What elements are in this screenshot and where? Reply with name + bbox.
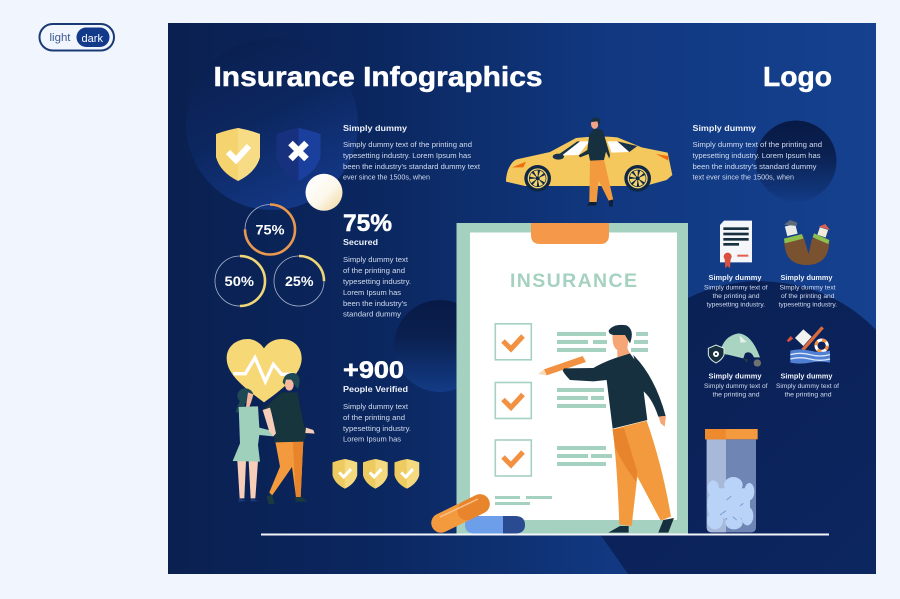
stat: +900 people verified: Lorem Ipsum has	[343, 434, 401, 444]
text block: top right: Simply dummy	[692, 123, 756, 133]
icons: three small shields	[332, 459, 419, 489]
label block: certificate	[704, 275, 768, 308]
icon: car accident	[708, 333, 761, 367]
label block: earthquake: of the printing and	[781, 293, 835, 300]
label block: earthquake: Simply dummy	[780, 275, 833, 282]
text block: top left: typesetting industry. Lorem Ipsum has	[343, 151, 471, 160]
checklist	[495, 324, 648, 505]
text block: top left	[343, 123, 481, 182]
label block: flood	[776, 374, 839, 398]
label block: earthquake: typesetting industry.	[778, 302, 837, 308]
illustration: yellow car with person	[506, 117, 672, 207]
label block: car accident: Simply dummy	[708, 374, 762, 380]
text block: top left: Simply dummy text of the printing and	[343, 140, 472, 149]
label block: certificate: Simply dummy text of	[704, 284, 768, 292]
pencil	[544, 356, 586, 375]
text block: top left: Simply dummy	[343, 123, 407, 133]
jar of pills	[705, 429, 758, 532]
checkbox 1	[495, 324, 531, 360]
clipboard	[456, 223, 688, 534]
label block: flood: the printing and	[784, 392, 832, 398]
stat: +900 people verified: of the printing and	[343, 413, 405, 422]
label block: car accident: Simply dummy text of	[704, 383, 768, 390]
checkbox 2	[495, 382, 531, 418]
title: Insurance Infographics	[214, 61, 542, 92]
decorative cream circle	[306, 174, 342, 211]
chart: 75% ring: 75%	[256, 222, 285, 238]
stat: 75% secured: Simply dummy text	[343, 255, 409, 264]
head	[612, 333, 630, 357]
chart: 25% ring: 25%	[285, 273, 314, 289]
icon: earthquake	[784, 220, 830, 265]
stat: 75% secured: Secured	[343, 237, 378, 247]
trousers	[613, 421, 671, 526]
blue capsule	[465, 516, 525, 534]
stat: +900 people verified	[343, 357, 411, 444]
stat: 75% secured	[343, 210, 411, 318]
label block: certificate: typesetting industry.	[706, 302, 765, 308]
text lines	[495, 332, 648, 505]
clipboard heading: INSURANCE	[510, 270, 637, 292]
label block: certificate: Simply dummy	[708, 275, 762, 282]
chart: 25% ring	[274, 256, 324, 306]
label block: car accident	[704, 374, 768, 398]
stat: +900 people verified: typesetting industry.	[343, 424, 411, 433]
icon: certificate	[720, 221, 752, 268]
label block: earthquake	[778, 275, 837, 308]
panel: infographic background	[168, 23, 876, 574]
stat: +900 people verified: People Verified	[343, 384, 408, 394]
orange capsule	[440, 499, 480, 523]
stat: 75% secured: of the printing and	[343, 266, 405, 275]
pills	[440, 499, 525, 534]
label block: flood: Simply dummy	[780, 374, 833, 380]
stat: 75% secured: standard dummy	[343, 310, 401, 318]
text block: top right: text ever since the 1500s, when	[692, 172, 794, 182]
stat: 75% secured: 75%	[343, 210, 392, 237]
light/dark toggle: light	[50, 32, 70, 44]
stat: 75% secured: Lorem Ipsum has	[343, 288, 401, 297]
stat: 75% secured: typesetting industry.	[343, 277, 411, 286]
ground line	[261, 534, 829, 536]
text block: top left: been the industry's standard dummy text	[343, 162, 481, 171]
label block: certificate: the printing and	[712, 293, 760, 300]
torso and front arm	[563, 353, 647, 429]
shoes	[608, 518, 674, 533]
label block: flood: Simply dummy text of	[776, 383, 839, 390]
back arm	[633, 355, 666, 417]
illustration: heart and couple	[227, 339, 315, 504]
illustration: man with pencil	[538, 325, 674, 533]
logo: Logo	[763, 61, 832, 92]
clipboard clip	[531, 223, 609, 244]
chart: 75% ring	[245, 204, 295, 254]
label block: earthquake: Simply dummy text	[780, 284, 836, 292]
icon: flood	[787, 327, 830, 364]
light/dark toggle	[40, 24, 114, 50]
checkbox 3	[495, 440, 531, 476]
text block: top right: typesetting industry. Lorem Ipsum has	[692, 151, 821, 160]
stat: +900 people verified: Simply dummy text	[343, 402, 409, 411]
chart: 50% ring	[215, 256, 265, 306]
text block: top left: ever since the 1500s, when	[343, 172, 430, 182]
text block: top right	[692, 123, 822, 182]
stat: +900 people verified: +900	[343, 357, 404, 384]
stat: 75% secured: been the industry's	[343, 299, 407, 308]
icon: yellow shield with check	[216, 128, 260, 181]
icon: blue shield with cross	[276, 128, 320, 181]
chart: 50% ring: 50%	[224, 273, 255, 289]
text block: top right: been the industry's standard dummy	[692, 162, 817, 171]
label block: car accident: the printing and	[712, 392, 760, 398]
light/dark toggle: dark	[82, 33, 103, 45]
text block: top right: Simply dummy text of the printing and	[692, 140, 822, 149]
